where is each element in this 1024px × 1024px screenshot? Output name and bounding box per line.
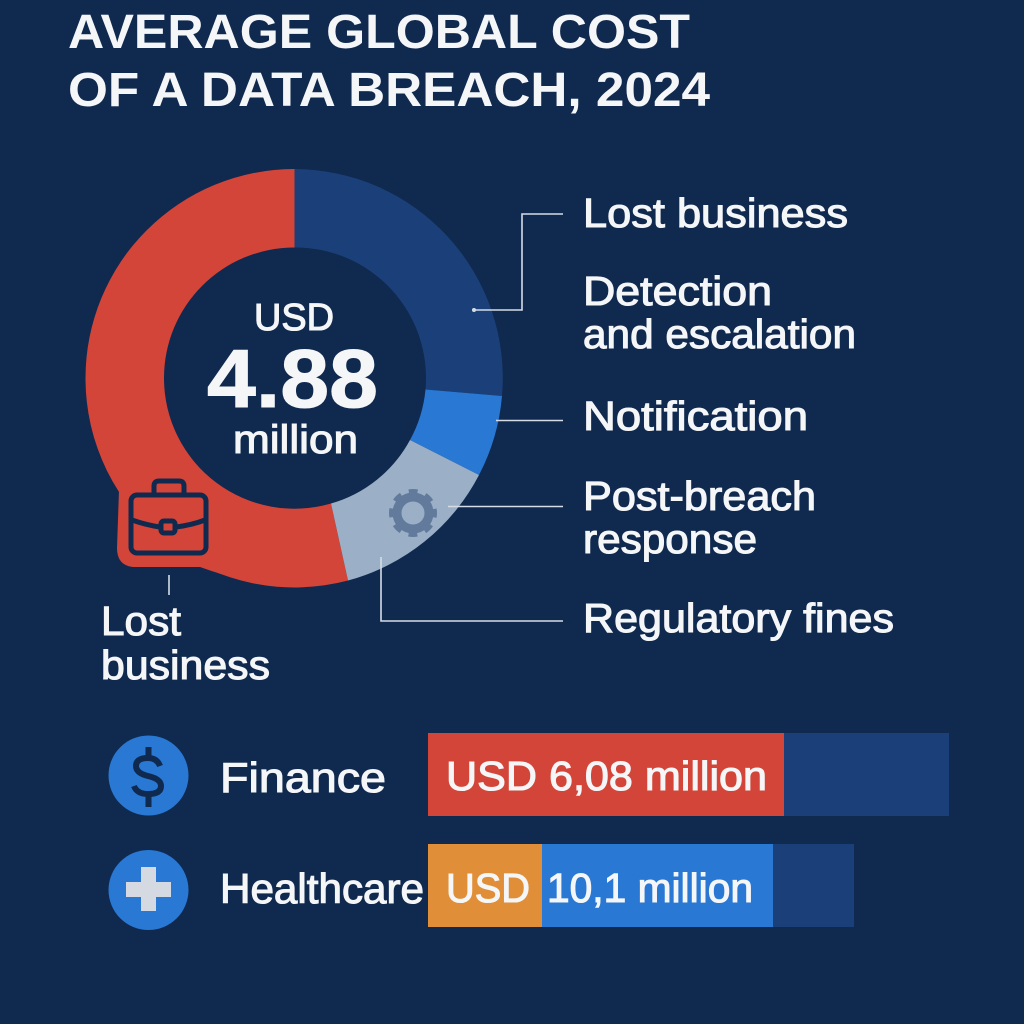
segment: post-breach response (grey) xyxy=(331,440,479,580)
label: healthcare: Healthcare xyxy=(220,865,424,912)
label: regulatory fines: Regulatory fines xyxy=(583,595,894,641)
icon: dollar xyxy=(108,736,188,816)
center total xyxy=(207,297,378,462)
bar: healthcare xyxy=(428,844,854,927)
center total: 4.88 xyxy=(207,332,378,425)
label: detection and escalation xyxy=(583,268,856,357)
label: lost business (left): business xyxy=(101,642,270,688)
row: healthcare xyxy=(108,844,854,930)
icon: cross xyxy=(108,850,188,930)
label: lost business: Lost business xyxy=(583,190,848,236)
title: OF A DATA BREACH, 2024 xyxy=(68,64,710,117)
icon: briefcase xyxy=(131,481,206,553)
label: lost business (left) xyxy=(101,598,270,688)
title: AVERAGE GLOBAL COST xyxy=(68,6,690,59)
row: finance xyxy=(108,733,949,816)
segment: lost business (red) xyxy=(85,169,348,587)
label: post-breach response: Post-breach xyxy=(583,473,816,519)
icon: gear xyxy=(392,492,434,534)
label: post-breach response xyxy=(583,473,816,562)
label: finance: Finance xyxy=(220,754,386,801)
label: lost business (left): Lost xyxy=(101,598,182,644)
bar: healthcare: USD xyxy=(446,865,530,911)
center total: million xyxy=(233,418,358,462)
bar: healthcare: 10,1 million xyxy=(547,865,753,911)
bar: finance: USD 6,08 million xyxy=(446,753,767,799)
label: notification: Notification xyxy=(583,393,808,439)
leader lines xyxy=(169,214,563,621)
label: detection and escalation: and escalation xyxy=(583,311,856,357)
label: detection and escalation: Detection xyxy=(583,268,772,314)
segment: notification (blue) xyxy=(410,390,502,475)
label: post-breach response: response xyxy=(583,516,757,562)
title xyxy=(68,6,710,117)
center total: USD xyxy=(254,297,334,339)
donut chart xyxy=(85,169,503,587)
bar: finance xyxy=(428,733,949,816)
segment: detection and escalation (dark blue) xyxy=(294,169,503,396)
